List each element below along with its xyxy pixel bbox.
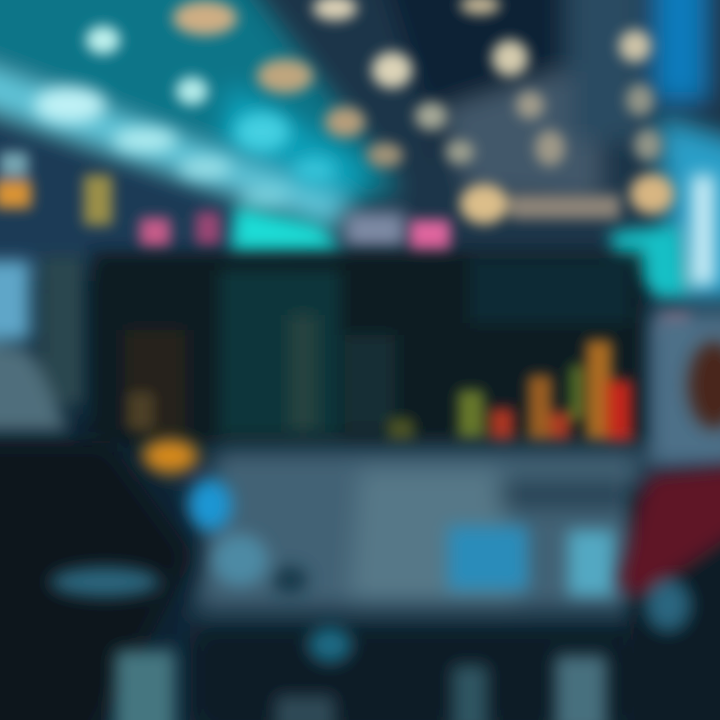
bright cyan patches	[34, 87, 714, 300]
person's highlighted sleeve	[50, 567, 160, 597]
figure: person in red at right	[618, 341, 720, 720]
figure: seated person silhouette left	[0, 440, 195, 720]
table objects	[142, 439, 614, 663]
floor strips	[115, 650, 607, 720]
ceiling: dark panels and teal bands	[0, 0, 720, 300]
bar chart on display	[128, 340, 632, 442]
ceiling lights	[86, 0, 674, 224]
panel: large display screen	[92, 252, 642, 444]
right wall	[645, 310, 720, 470]
left wall	[0, 255, 85, 435]
wall: coloured posters	[345, 212, 405, 248]
panel: conference table	[190, 450, 640, 720]
